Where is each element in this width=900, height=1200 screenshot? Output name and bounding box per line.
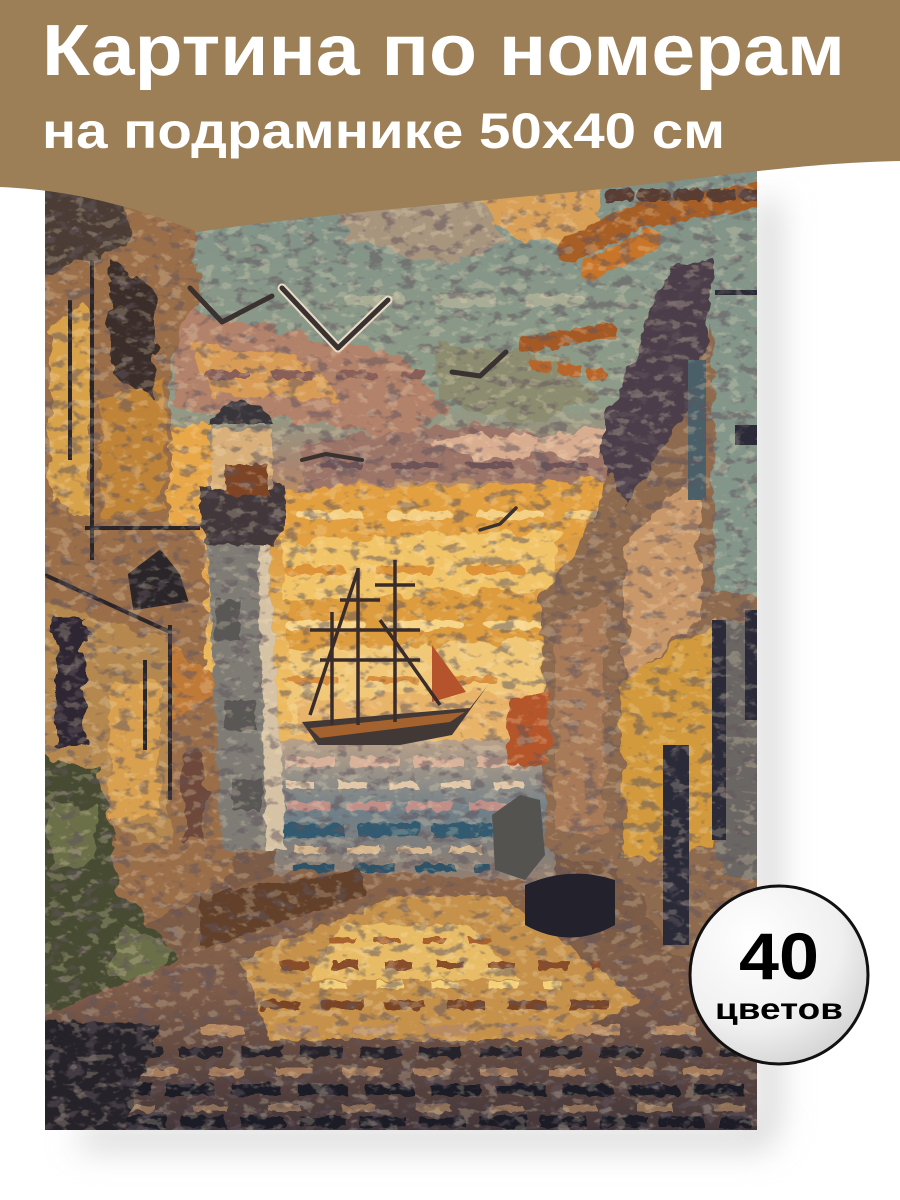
title: Картина по номерам bbox=[42, 11, 845, 91]
painting base bbox=[45, 190, 692, 960]
lighthouse bbox=[200, 400, 286, 850]
sky bbox=[164, 171, 757, 742]
right buildings bbox=[505, 250, 775, 960]
badge number: 40 bbox=[739, 919, 819, 993]
left building bbox=[30, 190, 230, 1015]
badge: 40 colours bbox=[690, 886, 868, 1064]
seagulls bbox=[190, 288, 516, 530]
header banner bbox=[0, 0, 900, 232]
painted texture highlights bbox=[45, 170, 757, 1130]
subtitle: на подрамнике 50х40 см bbox=[42, 103, 725, 159]
barrel bbox=[525, 874, 615, 938]
figure bbox=[492, 795, 545, 880]
tree foliage bbox=[525, 195, 757, 375]
cloud dabs bbox=[210, 300, 600, 680]
canvas drop shadow bbox=[80, 200, 779, 1148]
ground bbox=[45, 868, 757, 1130]
sea bbox=[275, 740, 555, 890]
right building details bbox=[663, 290, 757, 945]
badge label: цветов bbox=[715, 993, 843, 1026]
ship bbox=[302, 560, 488, 745]
painting bbox=[30, 170, 775, 1150]
building outlines left bbox=[45, 260, 200, 800]
painted texture shadows bbox=[45, 170, 757, 1130]
